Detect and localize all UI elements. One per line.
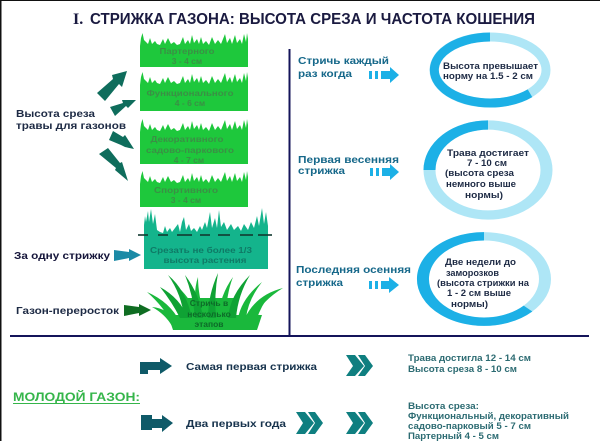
grass block: sports: Спортивного xyxy=(154,185,218,195)
label: first mowing: Самая первая стрижка xyxy=(186,362,318,373)
ring: last autumn: 1 - 2 см выше xyxy=(447,288,511,298)
label: cutting height xyxy=(16,108,127,132)
chevrons: first mowing xyxy=(346,355,373,376)
grass block: parterre: Партерного xyxy=(160,46,214,56)
ring: first spring: немного выше xyxy=(446,179,516,189)
vertical divider xyxy=(288,49,290,336)
grass block: decorative: Декоративного xyxy=(150,134,224,144)
title: I. xyxy=(73,11,83,28)
ring: every time xyxy=(434,37,546,103)
ring: first spring xyxy=(430,125,546,215)
label: cutting height: травы для газонов xyxy=(16,120,127,132)
grass block: decorative: садово-паркового xyxy=(146,145,234,155)
grass block: parterre xyxy=(140,33,248,67)
grass bush: Стричь в xyxy=(190,298,228,308)
ring: every time: Высота превышает xyxy=(443,61,539,71)
horizontal divider xyxy=(10,335,589,337)
chevrons: first two years xyxy=(296,412,373,434)
grass block: functional: 4 - 6 см xyxy=(175,98,205,108)
text: first mowing result xyxy=(408,353,531,374)
label: cutting height: Высота среза xyxy=(16,108,95,120)
arrow: first mowing xyxy=(140,358,172,374)
text: first mowing result: Высота среза 8 - 10 см xyxy=(408,364,517,374)
text: first two years result xyxy=(408,401,569,441)
grass block: functional: Функционального xyxy=(146,88,234,98)
ring: first spring: Трава достигает xyxy=(447,148,530,158)
teal grass block: one third rule xyxy=(138,208,272,269)
row: last autumn xyxy=(296,264,411,293)
ring: last autumn: нормы) xyxy=(451,299,488,309)
grass bush xyxy=(147,273,283,330)
title: СТРИЖКА ГАЗОНА: ВЫСОТА СРЕЗА И ЧАСТОТА КОШЕНИЯ xyxy=(90,11,535,28)
teal grass block: one third rule: высота растения xyxy=(164,255,246,265)
ring: last autumn: заморозков xyxy=(446,268,499,278)
ring: first spring: нормы) xyxy=(465,190,503,200)
ring: every time: норму на 1.5 - 2 см xyxy=(443,71,533,81)
ring: last autumn xyxy=(423,236,545,322)
arrow: first two years xyxy=(141,415,173,432)
arrow: overgrown lawn xyxy=(124,304,151,316)
grass bush: несколько xyxy=(187,309,231,319)
text: first two years result: Функциональный, декоративный xyxy=(408,411,569,421)
label: overgrown lawn: Газон-переросток xyxy=(16,306,120,317)
row: every time: раз когда xyxy=(298,68,352,80)
grass bush: этапов xyxy=(194,319,224,329)
text: first two years result: садово-парковый 5 - 7 см xyxy=(408,421,531,431)
text: first two years result: Высота среза: xyxy=(408,401,479,411)
young lawn heading: МОЛОДОЙ ГАЗОН: xyxy=(13,389,140,404)
row: first spring xyxy=(298,154,399,180)
ring: last autumn: (высота стрижки на xyxy=(437,278,530,288)
arrow: per one mowing xyxy=(114,249,141,261)
label: per one mowing: За одну стрижку xyxy=(14,250,110,262)
arrows to lawn types xyxy=(97,71,136,181)
text: first mowing result: Трава достигла 12 - 14 см xyxy=(408,353,531,363)
row: every time: Стричь каждый xyxy=(298,55,389,67)
row: last autumn: Последняя осенняя xyxy=(296,264,411,276)
grass block: sports xyxy=(140,171,248,207)
row: every time xyxy=(298,55,399,83)
ring: first spring: 7 - 10 см xyxy=(467,158,507,168)
grass block: parterre: 3 - 4 см xyxy=(172,56,202,66)
text: first two years result: Партерный 4 - 5 см xyxy=(408,431,499,441)
row: first spring: стрижка xyxy=(298,165,345,177)
grass block: decorative: 4 - 7 см xyxy=(174,155,204,165)
ring: last autumn: Две недели до xyxy=(445,257,517,267)
label: first two years: Два первых года xyxy=(186,419,287,430)
grass block: decorative xyxy=(140,119,248,165)
row: first spring: Первая весенняя xyxy=(298,154,399,166)
grass block: functional xyxy=(140,72,248,111)
grass block: sports: 3 - 4 см xyxy=(171,195,201,205)
ring: first spring: (высота среза xyxy=(445,168,515,178)
teal grass block: one third rule: Срезать не более 1/3 xyxy=(150,245,252,255)
row: last autumn: стрижка xyxy=(296,277,343,289)
